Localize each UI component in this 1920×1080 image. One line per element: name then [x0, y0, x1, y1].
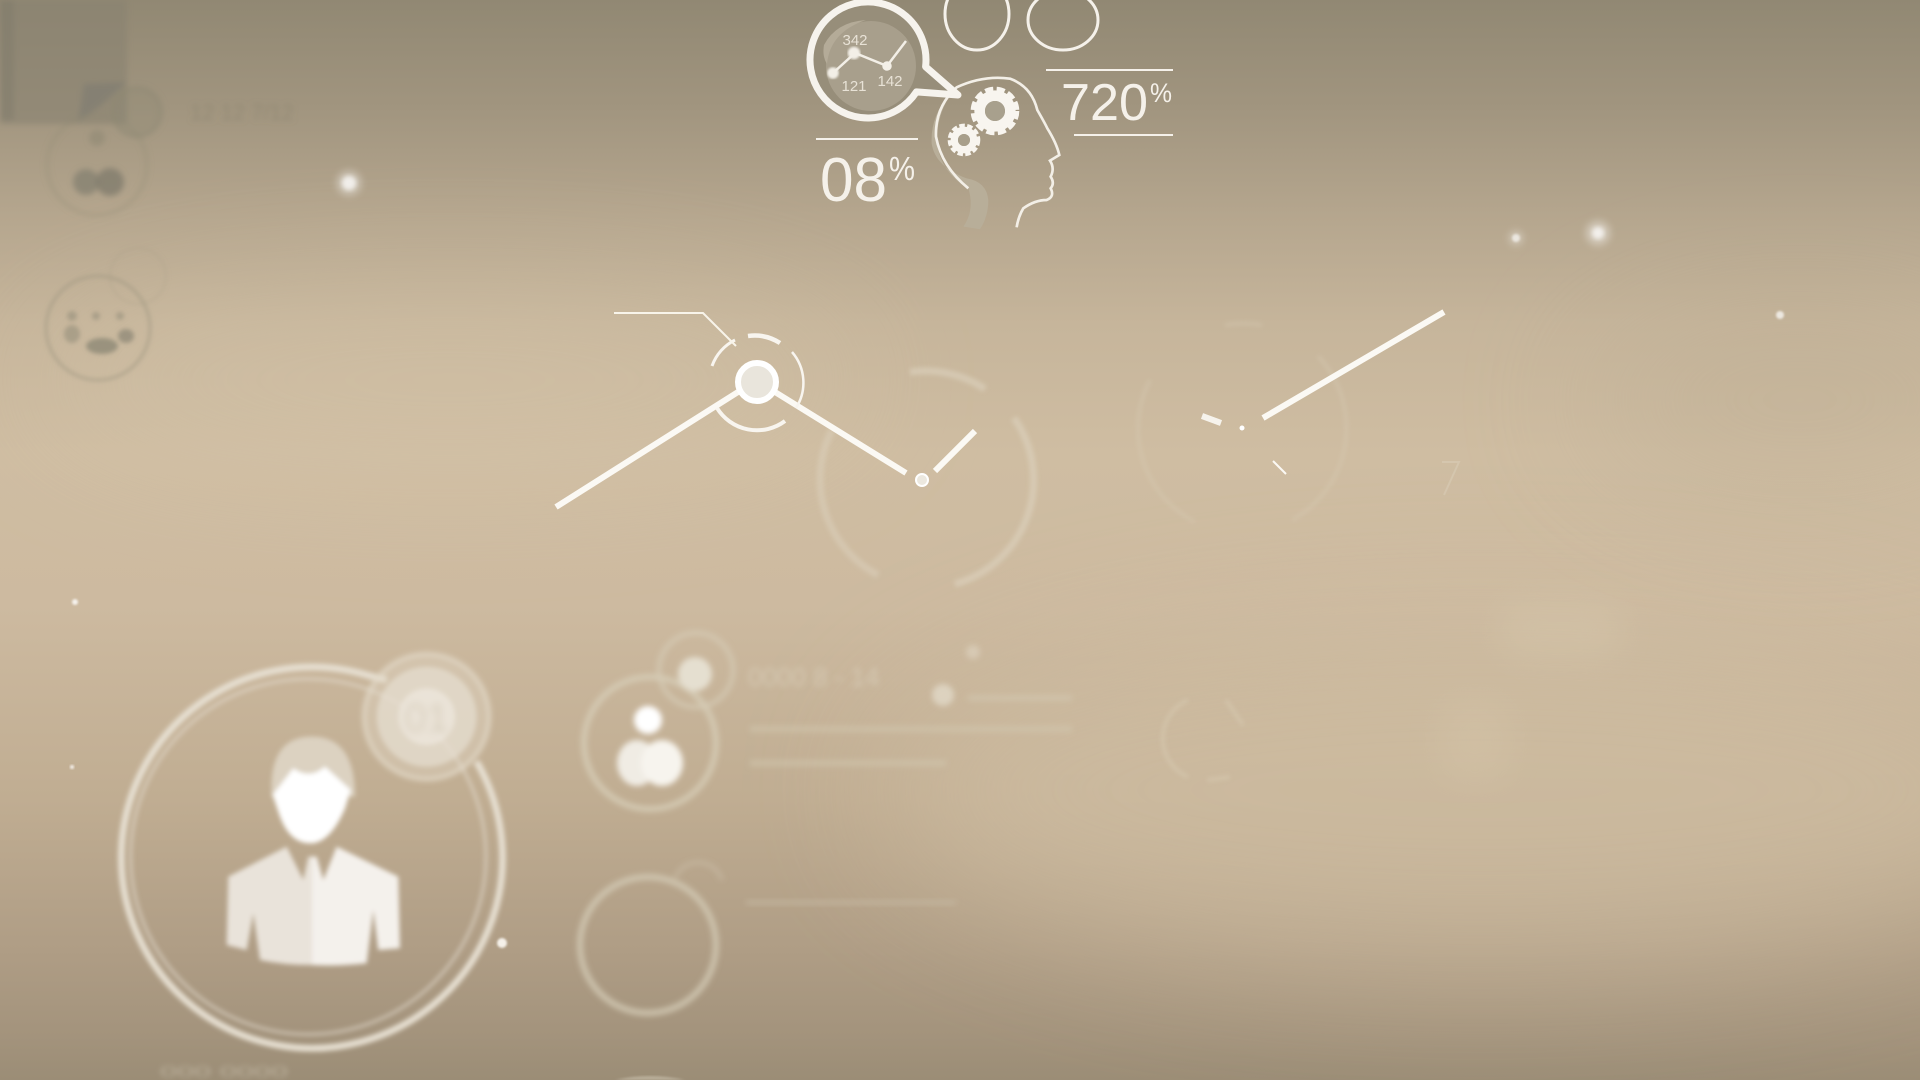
chart values: 342: [842, 32, 868, 49]
line chart white segments: [556, 312, 1444, 507]
chart values: 142: [877, 73, 903, 90]
second person item: [584, 633, 733, 809]
stat: 720%: %: [1150, 78, 1172, 108]
chart values: 121: [841, 78, 867, 95]
small chart nodes: [916, 426, 1244, 486]
mini line chart: [828, 41, 906, 78]
stat: 08%: [816, 138, 918, 215]
number badge: [361, 651, 493, 783]
stat: 08%: 08: [820, 146, 887, 215]
head and gears icon: [932, 78, 1059, 229]
top ovals: [945, 0, 1098, 50]
person silhouette: [227, 737, 400, 966]
top-left team icon ring: [46, 248, 166, 380]
bright particles: [70, 171, 1784, 769]
stat: 720%: 720: [1061, 74, 1148, 132]
number badge: 01: [404, 697, 449, 741]
large person profile: [121, 651, 503, 1048]
faint partial ring lower right: [1163, 700, 1243, 780]
large faint ring right: [1138, 323, 1347, 522]
main chart node with arcs: [712, 336, 803, 430]
faint seven mark: [1442, 462, 1459, 495]
third item ring: [580, 862, 722, 1013]
chart values: [841, 32, 903, 95]
callout leader line: [614, 313, 736, 346]
second item text block: [748, 645, 1072, 766]
stat: 08%: %: [889, 150, 915, 187]
small particle near large ring: [497, 938, 507, 948]
top-left blurred panel: 12 12 7/12: [190, 100, 294, 125]
top-left blurred panel: [0, 0, 294, 215]
large faint ring left: [820, 371, 1034, 584]
fourth item ring top: [615, 1076, 685, 1080]
third item text bar: [746, 900, 956, 905]
stat: 720%: [1046, 69, 1173, 136]
speech bubble with line chart: [810, 2, 958, 118]
small gear: [950, 126, 978, 154]
second item text block: 0000 8 - 14: [748, 662, 880, 692]
outer rings: [121, 667, 503, 1048]
large gear: [974, 90, 1016, 132]
